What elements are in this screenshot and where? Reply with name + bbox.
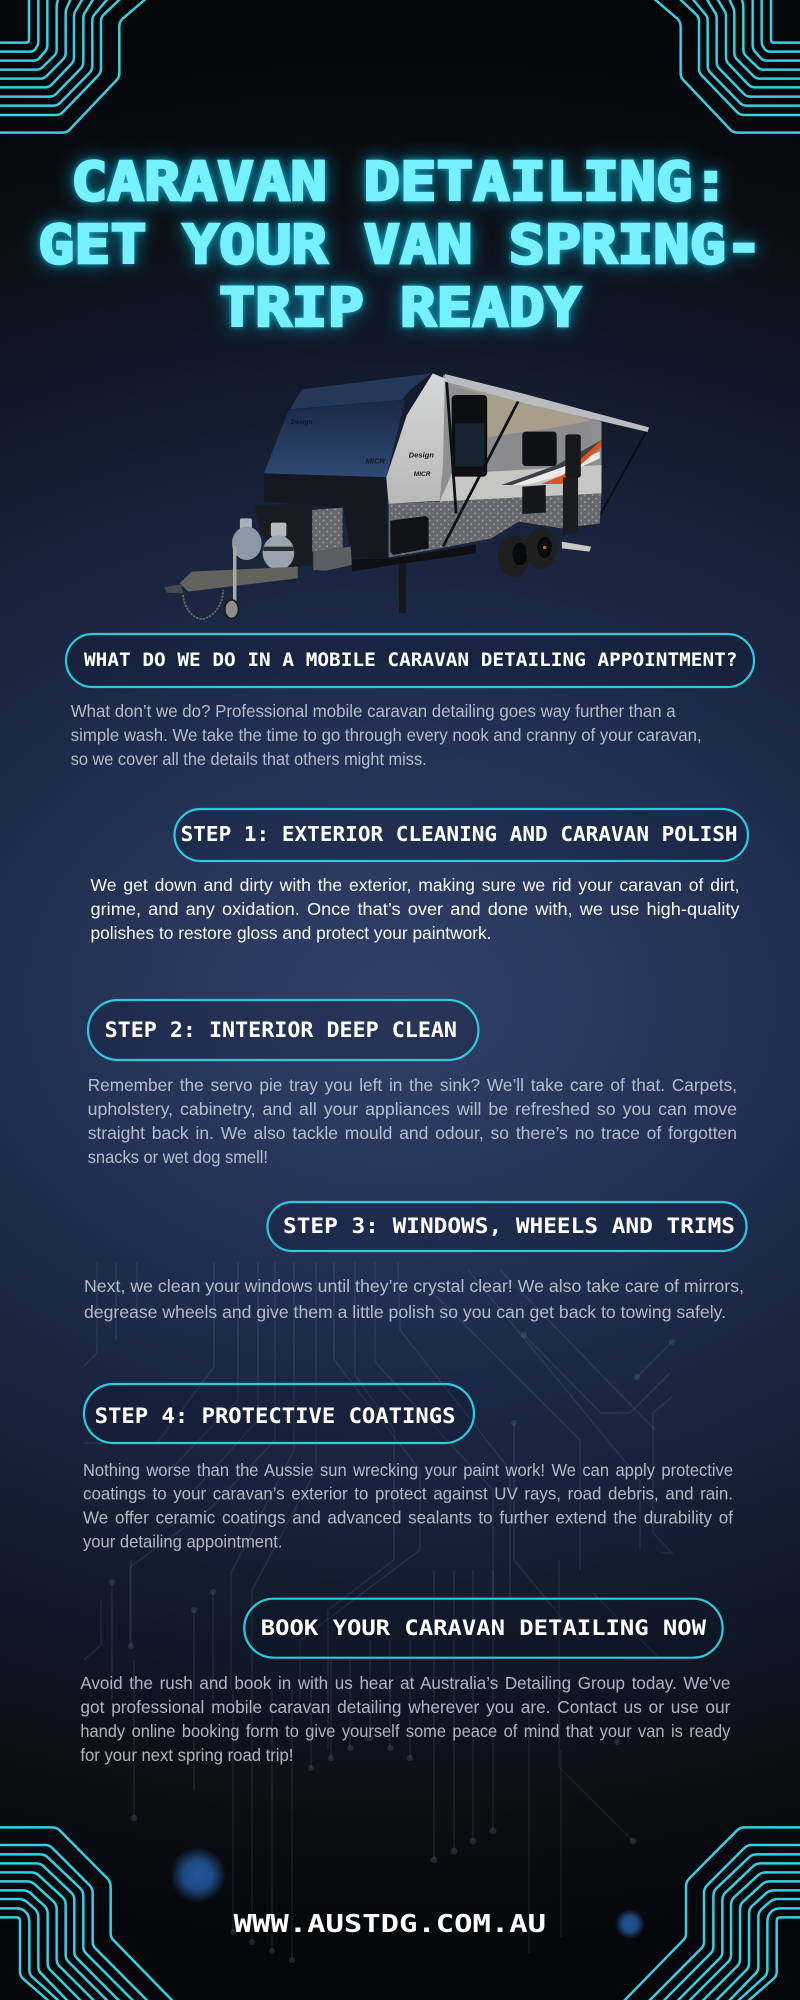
booking paragraph: got professional mobile caravan detailing wherever you are. Contact us or use our	[80, 1697, 731, 1717]
step 2 paragraph: Remember the servo pie tray you left in the sink? We’ll take care of that. Carpets,	[88, 1075, 737, 1095]
awning right strut	[598, 432, 646, 518]
hatch right	[522, 485, 546, 514]
intro paragraph	[71, 701, 702, 769]
caravan front lower	[264, 473, 388, 558]
step 1 paragraph: grime, and any oxidation. Once that’s over and done with, we use high-quality	[90, 899, 740, 919]
coupling	[164, 584, 183, 593]
heading box: step 1: STEP 1: EXTERIOR CLEANING AND CARAVAN POLISH	[181, 822, 738, 846]
intro paragraph: simple wash. We take the time to go through every nook and cranny of your caravan,	[71, 725, 702, 745]
corner circuit: top right	[652, 0, 800, 133]
step 3 paragraph: degrease wheels and give them a little polish so you can get back to towing safely.	[84, 1302, 726, 1322]
corner circuit: bottom left	[0, 1827, 177, 2000]
upper side wall	[486, 421, 592, 474]
booking paragraph: Avoid the rush and book in with us hear at Australia’s Detailing Group today. We’ve	[80, 1673, 730, 1693]
caravan decals: MICR	[414, 471, 431, 478]
wheels	[497, 528, 557, 577]
checker plate band	[389, 493, 601, 557]
intro paragraph: so we cover all the details that others might miss.	[71, 749, 427, 769]
heading box: step 1	[174, 809, 748, 861]
caravan decals: MICR	[366, 456, 386, 465]
safety chain	[183, 590, 223, 619]
heading box: step 4	[84, 1384, 474, 1443]
heading box: step 2: STEP 2: INTERIOR DEEP CLEAN	[105, 1018, 457, 1042]
graphic stripes	[502, 440, 601, 485]
booking paragraph	[80, 1673, 731, 1765]
front corner panel	[386, 373, 445, 504]
illustration: caravan	[164, 373, 649, 619]
step 4 paragraph	[83, 1460, 733, 1552]
silver lower band	[440, 465, 601, 502]
heading box: what do we do	[66, 634, 754, 687]
heading box: step 2	[88, 1000, 478, 1060]
step 4 paragraph: your detailing appointment.	[83, 1532, 282, 1552]
A-frame drawbar	[180, 567, 298, 592]
step 3 paragraph: Next, we clean your windows until they’re crystal clear! We also take care of mirrors,	[84, 1276, 744, 1296]
caravan decals: Design	[291, 419, 313, 426]
step 4 paragraph: We offer ceramic coatings and advanced sealants to further extend the durability of	[83, 1508, 733, 1528]
heading box: step 3: STEP 3: WINDOWS, WHEELS AND TRIMS	[283, 1214, 735, 1238]
title: GET YOUR VAN SPRING-	[38, 213, 762, 276]
caravan roof	[290, 373, 431, 409]
step 3 paragraph	[84, 1276, 744, 1322]
door upper	[565, 434, 581, 478]
toolbox lower tray	[313, 547, 352, 571]
step 2 paragraph	[88, 1075, 737, 1167]
step 2 paragraph: straight back in. We also tackle mould and odour, so there’s no trace of forgotten	[88, 1123, 737, 1143]
glow dot: right	[615, 1909, 645, 1939]
step 2 paragraph: upholstery, cabinetry, and all your appliances will be refreshed so you can move	[88, 1099, 737, 1119]
heading box: what do we do: WHAT DO WE DO IN A MOBILE CARAVAN DETAILING APPOINTMENT?	[84, 650, 738, 671]
title: CARAVAN DETAILING:	[71, 150, 729, 213]
heading box: step 4: STEP 4: PROTECTIVE COATINGS	[95, 1404, 455, 1428]
glow dot: left	[170, 1847, 226, 1903]
step 1 paragraph	[90, 875, 740, 943]
corner circuit: bottom right	[620, 1827, 800, 2000]
front toolbox	[254, 504, 312, 567]
heading box: step 3	[268, 1202, 746, 1251]
door lower	[563, 477, 578, 535]
step 1 paragraph: polishes to restore gloss and protect your paintwork.	[90, 923, 492, 943]
step 2 paragraph: snacks or wet dog smell!	[88, 1147, 268, 1167]
step 4 paragraph: Nothing worse than the Aussie sun wrecking your paint work! We can apply protective	[83, 1460, 733, 1480]
caravan decals: Design	[409, 450, 434, 459]
heading box: book now	[244, 1599, 723, 1658]
circuit board pattern	[84, 1262, 675, 1963]
step 1 paragraph: We get down and dirty with the exterior, making sure we rid your caravan of dirt,	[90, 875, 740, 895]
step	[562, 542, 591, 552]
caravan front upper	[264, 400, 405, 477]
title: TRIP READY	[219, 276, 581, 339]
awning underside	[448, 385, 591, 437]
website footer: WWW.AUSTDG.COM.AU	[234, 1909, 546, 1938]
awning struts	[443, 380, 521, 547]
hatch left	[390, 516, 429, 555]
jockey wheel	[225, 547, 238, 619]
gas bottles	[232, 518, 294, 570]
heading box: book now: BOOK YOUR CARAVAN DETAILING NOW	[261, 1616, 706, 1640]
step 4 paragraph: coatings to your caravan’s exterior to protect against UV rays, road debris, and rain.	[83, 1484, 733, 1504]
window large	[452, 395, 487, 477]
caravan decals	[291, 419, 434, 478]
title	[38, 150, 762, 339]
corner circuit: top left	[0, 0, 148, 133]
booking paragraph: handy online booking form to give yourself some peace of mind that your van is ready	[80, 1721, 731, 1741]
intro paragraph: What don’t we do? Professional mobile caravan detailing goes way further than a	[71, 701, 676, 721]
caravan rear wall	[388, 375, 601, 503]
chassis	[352, 544, 476, 572]
awning roller bar	[445, 374, 649, 432]
window small	[522, 432, 557, 466]
jack stand	[399, 563, 406, 613]
toolbox plate side	[312, 508, 343, 552]
booking paragraph: for your next spring road trip!	[80, 1745, 293, 1765]
